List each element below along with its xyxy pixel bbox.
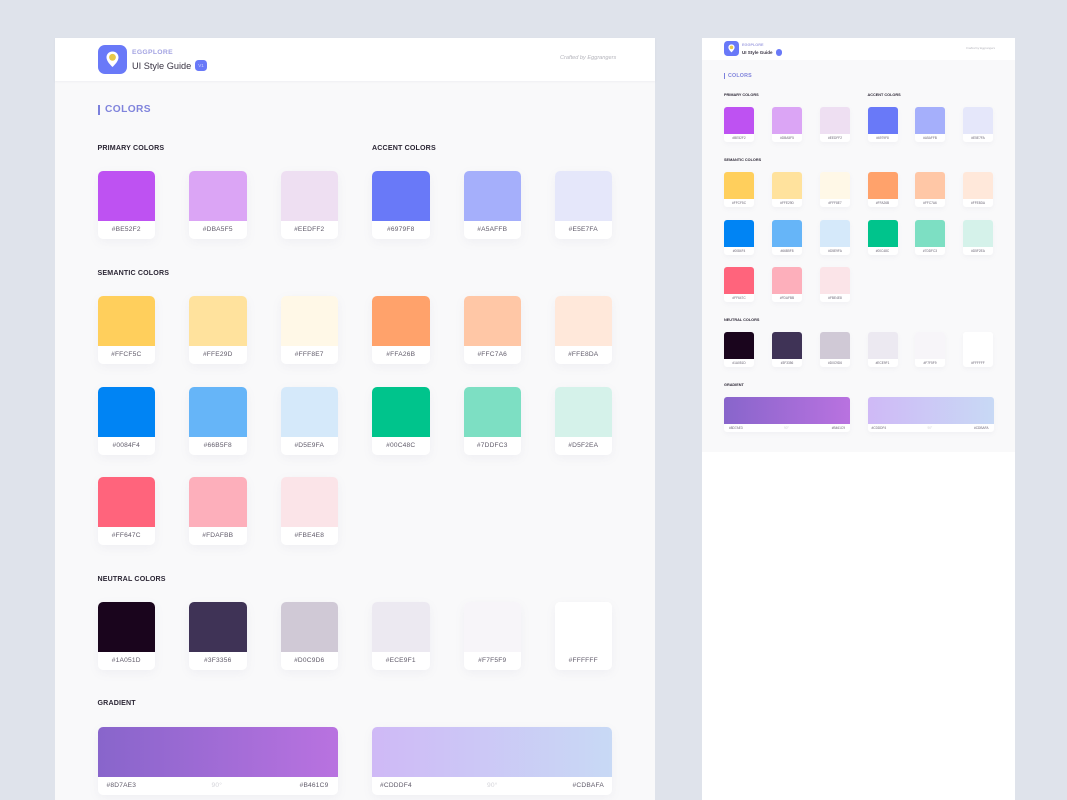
panel: large colors page [55,38,655,800]
swatch 1A051D: #1A051D [112,657,141,664]
small swatch A5AFFB [915,107,945,142]
small swatch FFE29D [772,172,802,207]
small swatch FDAFBB [772,267,802,302]
small swatch BE52F2: #BE52F2 [732,136,746,140]
swatch D0C9D6: #D0C9D6 [294,657,324,664]
small swatch 7DDFC3 [915,220,945,255]
small swatch D0C9D6: #D0C9D6 [828,360,842,364]
small swatch FF647C: #FF647C [732,296,746,300]
small swatch 3F3356 [772,332,802,367]
small swatch 7DDFC3: #7DDFC3 [923,248,937,252]
swatch E5E7FA [554,171,612,239]
gradient swatch purple [98,727,338,795]
small swatch BE52F2 [724,107,754,142]
small gradient swatch purple: #8D7AE3 [729,426,743,430]
swatch FBE4E8: #FBE4E8 [294,532,324,539]
gradient swatch purple: #B461C9 [300,782,328,789]
small swatch 0084F4 [724,220,754,255]
credit text: Crafted by Eggrangers [560,55,616,61]
swatch EEDFF2 [280,171,338,239]
small brand name: EGGPLORE [742,42,764,46]
swatch F7F5F9 [464,602,521,670]
small swatch FFA26B: #FFA26B [876,200,889,204]
gradient swatch purple: 90° [212,782,222,789]
brand name: EGGPLORE [132,49,173,56]
heading: neutral colors: NEUTRAL COLORS [98,575,166,583]
swatch FDAFBB: #FDAFBB [202,532,233,539]
swatch 0084F4 [98,387,155,455]
swatch 3F3356: #3F3356 [204,657,231,664]
swatch D5E9FA [280,387,338,455]
swatch FFF8E7: #FFF8E7 [295,351,324,358]
small swatch 6979F8 [868,107,898,142]
swatch FFE29D [189,296,246,364]
version badge [195,60,207,71]
small swatch 1A051D: #1A051D [732,360,746,364]
swatch FFE8DA [554,296,612,364]
small swatch D5E9FA: #D5E9FA [828,248,842,252]
swatch FFF8E7 [280,296,338,364]
swatch FF647C [98,477,155,545]
small gradient swatch lavender: #CDDDF4 [872,426,886,430]
small heading: gradient: GRADIENT [724,383,744,387]
swatch 66B5F8: #66B5F8 [204,442,232,449]
swatch D5F2EA: #D5F2EA [568,442,598,449]
version badge: V1 [198,63,204,68]
heading: gradient: GRADIENT [98,699,136,707]
swatch FFCF5C: #FFCF5C [111,351,141,358]
small swatch D5E9FA [820,220,850,255]
small swatch FFF8E7 [820,172,850,207]
heading: primary colors: PRIMARY COLORS [98,144,164,152]
small swatch 00C48C: #00C48C [876,248,889,252]
swatch EEDFF2: #EEDFF2 [294,226,324,233]
section heading: colors: COLORS [105,104,151,114]
small heading: neutral: NEUTRAL COLORS [724,318,759,322]
small swatch FFA26B [868,172,898,207]
swatch FFA26B [372,296,430,364]
swatch 00C48C: #00C48C [386,442,415,449]
swatch A5AFFB: #A5AFFB [477,226,507,233]
small swatch F7F5F9 [915,332,945,367]
small swatch DBA5F5: #DBA5F5 [780,136,794,140]
swatch D0C9D6 [280,602,338,670]
small swatch EEDFF2 [820,107,850,142]
small swatch FDAFBB: #FDAFBB [780,296,794,300]
small swatch FBE4E8 [820,267,850,302]
swatch FFE8DA: #FFE8DA [568,351,598,358]
swatch FFCF5C [98,296,155,364]
panel: small colors page [702,38,1015,800]
small swatch 66B5F8: #66B5F8 [781,248,793,252]
small swatch FFE29D: #FFE29D [780,200,794,204]
small gradient swatch lavender: 90° [928,426,932,430]
swatch D5F2EA [554,387,612,455]
small swatch FFFFFF: #FFFFFF [971,360,985,364]
small swatch 3F3356: #3F3356 [781,360,793,364]
swatch BE52F2: #BE52F2 [112,226,141,233]
small swatch FF647C [724,267,754,302]
small swatch FFCF5C [724,172,754,207]
small swatch FFC7A6 [915,172,945,207]
small swatch 6979F8: #6979F8 [876,136,889,140]
small swatch FFCF5C: #FFCF5C [732,200,746,204]
swatch 7DDFC3: #7DDFC3 [477,442,508,449]
heading: accent colors: ACCENT COLORS [372,144,436,152]
small swatch 0084F4: #0084F4 [733,248,745,252]
swatch BE52F2 [98,171,155,239]
swatch FFFFFF [554,602,612,670]
icon: small map pin logo [724,41,739,56]
swatch 6979F8 [372,171,430,239]
small swatch D5F2EA [963,220,993,255]
small swatch E5E7FA: #E5E7FA [971,136,985,140]
swatch F7F5F9: #F7F5F9 [478,657,506,664]
swatch FDAFBB [189,477,246,545]
small swatch EEDFF2: #EEDFF2 [828,136,842,140]
small gradient swatch lavender: #CDBAFA [974,426,988,430]
gradient swatch lavender [372,727,612,795]
small swatch FFF8E7: #FFF8E7 [828,200,842,204]
small heading: semantic: SEMANTIC COLORS [724,158,761,162]
swatch FFFFFF: #FFFFFF [569,657,598,664]
small gradient swatch purple: #B461C9 [832,426,845,430]
small swatch FFC7A6: #FFC7A6 [923,200,937,204]
swatch 1A051D [98,602,155,670]
small gradient swatch purple: 90° [784,426,789,430]
small swatch A5AFFB: #A5AFFB [923,136,937,140]
small guide title: UI Style Guide [742,50,773,54]
swatch D5E9FA: #D5E9FA [294,442,324,449]
small swatch D0C9D6 [820,332,850,367]
gradient swatch lavender: #CDBAFA [573,782,604,789]
swatch FBE4E8 [280,477,338,545]
gradient swatch lavender: #CDDDF4 [380,782,412,789]
small swatch FBE4E8: #FBE4E8 [828,296,842,300]
swatch DBA5F5: #DBA5F5 [203,226,233,233]
small credit text: Crafted by Eggrangers [966,46,995,50]
small swatch D5F2EA: #D5F2EA [971,248,985,252]
swatch 7DDFC3 [464,387,521,455]
small swatch FFFFFF [963,332,993,367]
small swatch FFE8DA [963,172,993,207]
small section heading: COLORS [728,72,752,78]
small swatch 66B5F8 [772,220,802,255]
small swatch 00C48C [868,220,898,255]
swatch ECE9F1: #ECE9F1 [386,657,416,664]
preview body background [702,60,1015,452]
small version badge [776,49,782,56]
small swatch FFE8DA: #FFE8DA [971,200,985,204]
small gradient swatch lavender [868,397,994,432]
small heading: accent: ACCENT COLORS [868,93,901,97]
small swatch E5E7FA [963,107,993,142]
small gradient swatch purple [724,397,850,432]
gradient swatch purple: #8D7AE3 [106,782,136,789]
small swatch ECE9F1 [868,332,898,367]
small heading: primary: PRIMARY COLORS [724,93,759,97]
heading: semantic colors: SEMANTIC COLORS [98,269,169,277]
icon: map pin logo [98,45,127,74]
swatch FFC7A6: #FFC7A6 [477,351,507,358]
swatch FF647C: #FF647C [112,532,141,539]
small swatch F7F5F9: #F7F5F9 [924,360,936,364]
swatch E5E7FA: #E5E7FA [569,226,598,233]
small swatch DBA5F5 [772,107,802,142]
swatch 66B5F8 [189,387,246,455]
swatch 3F3356 [189,602,246,670]
swatch DBA5F5 [189,171,246,239]
gradient swatch lavender: 90° [487,782,498,789]
swatch FFE29D: #FFE29D [203,351,233,358]
swatch A5AFFB [464,171,521,239]
swatch FFA26B: #FFA26B [386,351,415,358]
swatch 6979F8: #6979F8 [387,226,414,233]
swatch ECE9F1 [372,602,430,670]
swatch FFC7A6 [464,296,521,364]
small swatch ECE9F1: #ECE9F1 [876,360,889,364]
small swatch 1A051D [724,332,754,367]
swatch 0084F4: #0084F4 [113,442,140,449]
guide title: UI Style Guide [132,61,191,71]
header bar [55,38,655,81]
swatch 00C48C [372,387,430,455]
